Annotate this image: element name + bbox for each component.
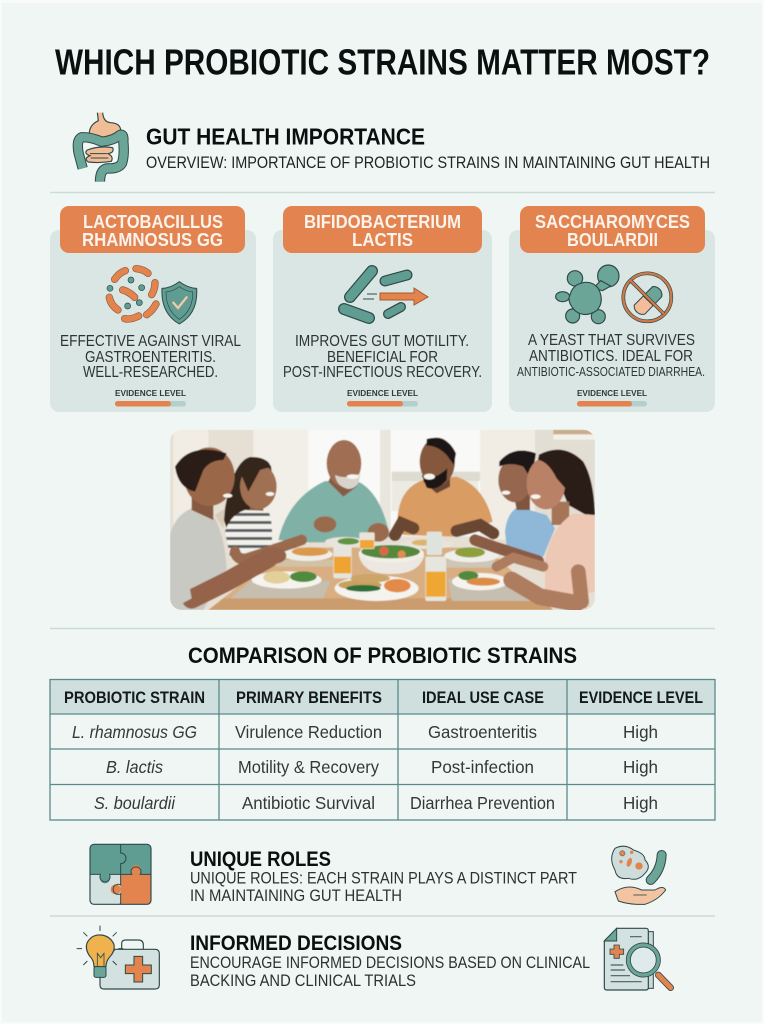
panel: lactobacillus rhamnosus GG: GASTROENTERITIS. xyxy=(85,349,216,366)
panel: lactobacillus rhamnosus GG: RHAMNOSUS GG xyxy=(82,229,223,250)
table row: L. rhamnosus GG: Gastroenteritis xyxy=(428,722,537,742)
icon: digestive system xyxy=(78,113,124,182)
panel: saccharomyces boulardii: BOULARDII xyxy=(567,229,658,250)
table row: B. lactis: High xyxy=(623,757,658,777)
panel: bifidobacterium lactis: BIFIDOBACTERIUM xyxy=(304,211,461,232)
heading: informed decisions: INFORMED DECISIONS xyxy=(190,932,402,955)
girl xyxy=(223,457,272,528)
panel: lactobacillus rhamnosus GG: EVIDENCE LEVEL xyxy=(115,388,186,398)
panel: bifidobacterium lactis xyxy=(273,206,492,412)
glasses xyxy=(333,546,352,578)
panel: saccharomyces boulardii: ANTIBIOTICS. IDEAL FOR xyxy=(529,348,693,365)
icon: puzzle xyxy=(90,844,151,904)
panel: saccharomyces boulardii: A YEAST THAT SURVIVES xyxy=(528,332,695,349)
panel: saccharomyces boulardii: EVIDENCE LEVEL xyxy=(577,388,647,398)
table header: PROBIOTIC STRAIN xyxy=(64,689,205,707)
text: informed decisions description: ENCOURAGE INFORMED DECISIONS BASED ON CLINICAL xyxy=(190,954,590,972)
icon: hand holding microbes xyxy=(612,846,666,904)
panel: saccharomyces boulardii xyxy=(509,206,715,412)
table header xyxy=(64,689,703,707)
table row: L. rhamnosus GG: Virulence Reduction xyxy=(235,722,382,742)
panel: bifidobacterium lactis: BENEFICIAL FOR xyxy=(327,349,438,366)
salad bowl xyxy=(359,555,424,574)
place mats xyxy=(231,581,331,598)
section heading: comparison: COMPARISON OF PROBIOTIC STRAINS xyxy=(188,643,577,668)
icon: yeast and no antibiotics xyxy=(556,265,671,324)
table header: IDEAL USE CASE xyxy=(422,689,544,707)
panel: lactobacillus rhamnosus GG: EFFECTIVE AGAINST VIRAL xyxy=(60,333,241,350)
panel: saccharomyces boulardii: ANTIBIOTIC-ASSOCIATED DIARRHEA. xyxy=(517,365,705,379)
table row: B. lactis: Motility & Recovery xyxy=(238,757,379,777)
table row: S. boulardii: High xyxy=(623,793,658,813)
heading: unique roles: UNIQUE ROLES xyxy=(190,848,331,871)
table row: B. lactis xyxy=(106,757,658,777)
girl arm xyxy=(235,540,302,559)
table row: L. rhamnosus GG xyxy=(72,722,658,742)
icon: bacteria with motion arrow xyxy=(344,271,428,318)
section heading: gut health importance: GUT HEALTH IMPORTANCE xyxy=(146,124,425,150)
woman xyxy=(538,450,595,520)
table row: L. rhamnosus GG: L. rhamnosus GG xyxy=(72,722,197,742)
panel: bifidobacterium lactis: EVIDENCE LEVEL xyxy=(347,388,418,398)
panel: saccharomyces boulardii: SACCHAROMYCES xyxy=(535,211,690,232)
father xyxy=(397,477,493,537)
table row: S. boulardii: Diarrhea Prevention xyxy=(410,793,555,813)
panel: bifidobacterium lactis: IMPROVES GUT MOTILITY. xyxy=(295,333,469,350)
text: informed decisions description xyxy=(190,954,590,990)
table header: PRIMARY BENEFITS xyxy=(236,689,382,707)
panel: bifidobacterium lactis: POST-INFECTIOUS RECOVERY. xyxy=(283,364,482,381)
table header: EVIDENCE LEVEL xyxy=(579,689,703,707)
icon: light bulb and medical kit xyxy=(77,926,159,989)
icon: bacteria and shield xyxy=(107,269,197,324)
text: unique roles description xyxy=(190,870,577,905)
table row: B. lactis: B. lactis xyxy=(106,757,163,777)
table row: S. boulardii: S. boulardii xyxy=(94,793,176,813)
panel: bifidobacterium lactis: LACTIS xyxy=(352,229,413,250)
panel: lactobacillus rhamnosus GG xyxy=(50,206,256,412)
right boy xyxy=(505,507,555,557)
table row: L. rhamnosus GG: High xyxy=(623,722,658,742)
left boy xyxy=(170,508,227,610)
table row: S. boulardii: Antibiotic Survival xyxy=(242,793,375,813)
photo: family eating a healthy meal xyxy=(170,430,595,610)
icon: clinical document and magnifier xyxy=(604,928,671,990)
comparison table xyxy=(50,680,715,820)
right boy arm xyxy=(475,540,538,561)
plates xyxy=(252,571,322,589)
table row: S. boulardii xyxy=(94,793,658,813)
table row: B. lactis: Post-infection xyxy=(431,757,534,777)
grandfather xyxy=(278,481,390,542)
text: unique roles description: IN MAINTAINING GUT HEALTH xyxy=(190,887,402,905)
panel: lactobacillus rhamnosus GG: LACTOBACILLUS xyxy=(83,211,223,232)
text: unique roles description: UNIQUE ROLES: EACH STRAIN PLAYS A DISTINCT PART xyxy=(190,870,577,888)
panel: lactobacillus rhamnosus GG: WELL-RESEARCHED. xyxy=(83,364,218,381)
text: informed decisions description: BACKING AND CLINICAL TRIALS xyxy=(190,972,416,990)
table xyxy=(208,548,553,610)
main plate xyxy=(335,576,419,601)
